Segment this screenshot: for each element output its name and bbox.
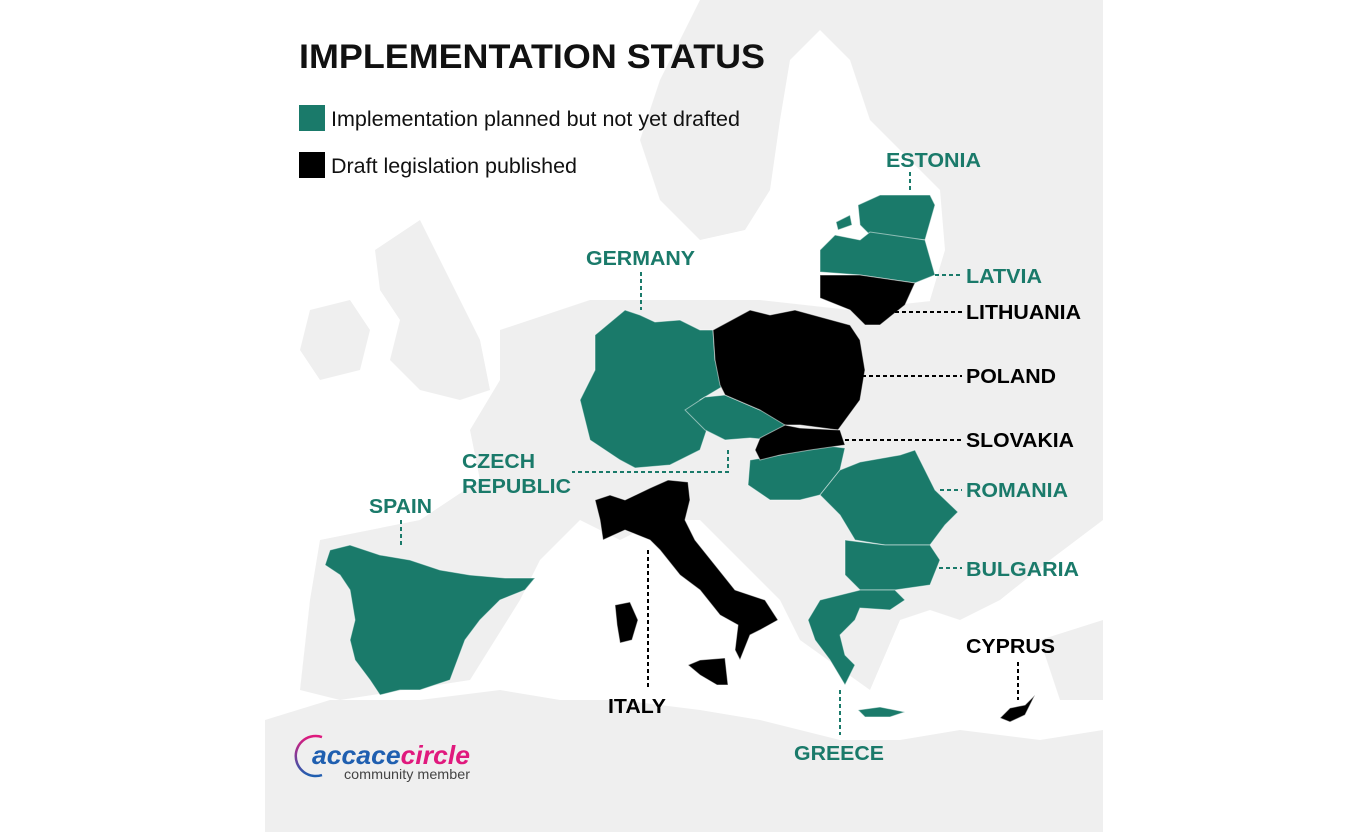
country labels: ITALY [608, 696, 667, 718]
country labels: CYPRUS [966, 636, 1055, 658]
legend: draft: Draft legislation published [331, 155, 577, 178]
legend: planned: Implementation planned but not yet drafted [331, 108, 740, 131]
countries draft (black) [595, 275, 1035, 722]
leader lines [401, 172, 1018, 735]
country labels: POLAND [966, 366, 1056, 388]
country labels: BULGARIA [966, 559, 1079, 581]
logo [296, 736, 470, 782]
country labels: ESTONIA [886, 150, 981, 172]
country labels: ROMANIA [966, 480, 1068, 502]
country labels: LATVIA [966, 266, 1042, 288]
country labels: SLOVAKIA [966, 430, 1074, 452]
country labels: GERMANY [586, 248, 696, 270]
country labels: CZECH [462, 451, 535, 473]
country labels: REPUBLIC [462, 476, 571, 498]
title: IMPLEMENTATION STATUS [299, 38, 765, 76]
logo: accacecircle [312, 740, 470, 770]
country labels: SPAIN [369, 496, 432, 518]
countries planned (teal) [325, 195, 958, 717]
country labels: GREECE [794, 743, 884, 765]
country labels: LITHUANIA [966, 302, 1081, 324]
country labels [369, 150, 1081, 765]
logo: community member [344, 766, 470, 782]
